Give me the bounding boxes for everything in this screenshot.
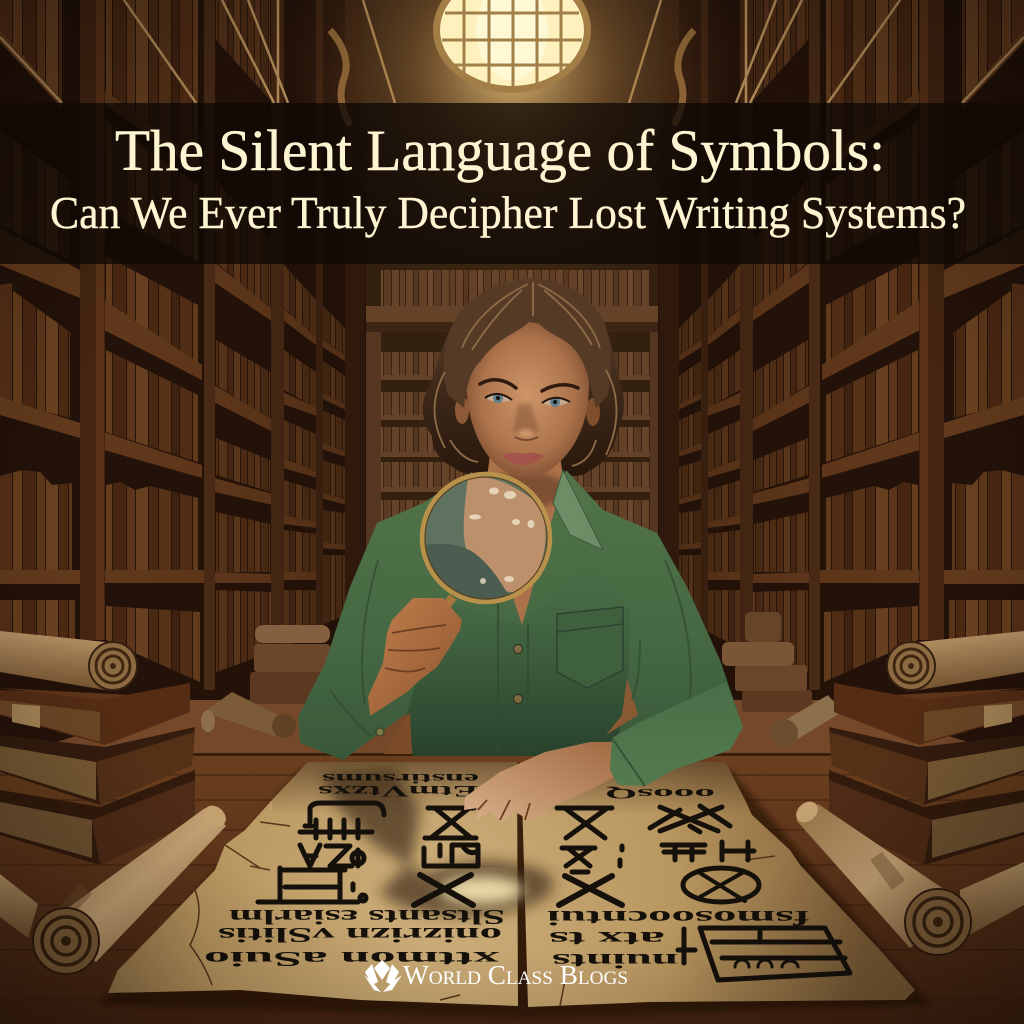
magnifier shadow on page xyxy=(322,768,553,916)
left book stack xyxy=(0,631,195,865)
right bookshelves xyxy=(658,0,1024,700)
lit spot xyxy=(440,876,524,904)
upside-down script: xttmon aSuio xyxy=(204,947,499,971)
wordmark: World Class Blogs xyxy=(403,960,628,990)
magnifier handle xyxy=(441,597,453,612)
upside-down script xyxy=(204,770,809,973)
hair front xyxy=(444,278,611,408)
parchment shadow xyxy=(100,770,930,1018)
left page xyxy=(108,762,518,1006)
ceiling beams and rays xyxy=(0,0,1024,125)
hand on parchment xyxy=(464,742,616,822)
cracks xyxy=(190,822,775,1006)
title banner xyxy=(0,103,1024,264)
top edge shading xyxy=(272,762,752,815)
upside-down script: ooosQ xyxy=(604,785,715,801)
eyebrows xyxy=(480,380,578,391)
placket and buttons xyxy=(376,600,528,755)
upside-down script: fsmosoocntui xyxy=(547,906,809,930)
right lower scroll xyxy=(792,797,1024,955)
window glow xyxy=(250,0,774,300)
right forearm and cuff xyxy=(610,682,743,786)
upside-down script: nuints xyxy=(552,949,678,973)
collar xyxy=(553,470,603,550)
upside-down script: enstirsums xyxy=(321,770,479,785)
torso shading xyxy=(407,560,630,756)
hair back xyxy=(423,278,624,476)
left lower scroll xyxy=(0,801,230,974)
left bookshelves xyxy=(0,0,366,700)
right page xyxy=(521,762,915,1007)
face xyxy=(466,322,589,477)
upside-down script: atx ts xyxy=(549,927,665,951)
ears xyxy=(455,396,469,424)
right book stack xyxy=(829,631,1024,865)
pocket xyxy=(557,607,623,688)
eyes xyxy=(485,393,570,407)
lips xyxy=(502,453,544,465)
table xyxy=(0,753,1024,1024)
back wall bookcase xyxy=(365,262,666,627)
back stack of books left xyxy=(201,625,330,738)
symbols xyxy=(258,803,850,980)
sleeve folds xyxy=(330,560,691,736)
upside-down script: Sltsants ɛsiarlm xyxy=(228,905,505,929)
round skylight window xyxy=(433,0,591,93)
upside-down script: EtmVtzxs xyxy=(318,782,478,799)
shirt silhouette xyxy=(298,470,743,786)
magnifying glass xyxy=(422,474,550,602)
upside-down script: onizrizn vSlitis xyxy=(218,923,502,947)
scholar xyxy=(298,278,743,786)
back stack of books right xyxy=(722,612,842,747)
gap between arm and torso xyxy=(606,678,638,735)
title line 1: The Silent Language of Symbols: xyxy=(115,118,885,183)
nose xyxy=(514,404,538,440)
parchment with symbols xyxy=(100,762,930,1018)
logo xyxy=(364,960,628,992)
neck xyxy=(468,455,575,625)
holding hand xyxy=(368,598,462,716)
logo icon xyxy=(364,960,402,992)
hair highlights xyxy=(434,282,616,466)
title line 2: Can We Ever Truly Decipher Lost Writing Systems? xyxy=(50,188,966,238)
